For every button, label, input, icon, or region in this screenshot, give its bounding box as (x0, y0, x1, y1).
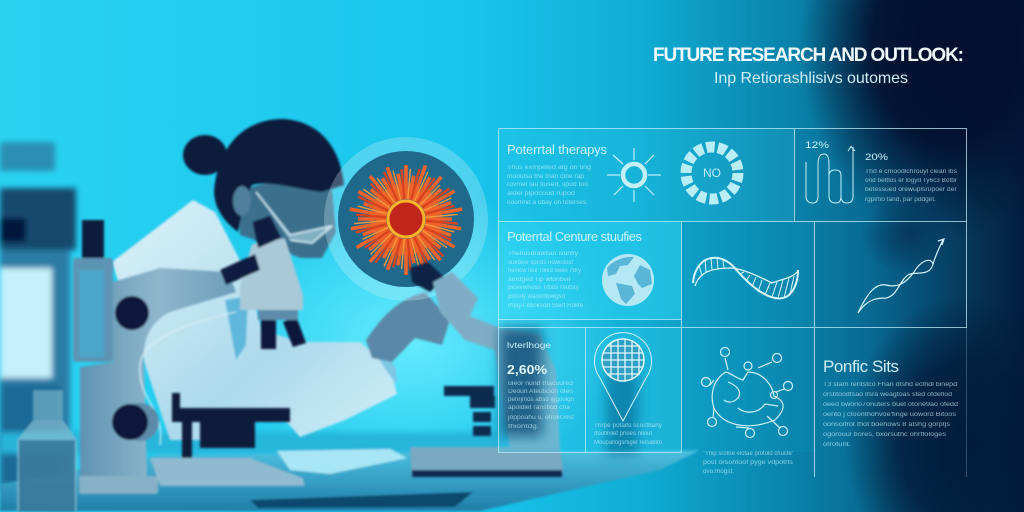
text block: muoutsa the than cthe rap (507, 174, 585, 180)
bottle (17, 390, 77, 511)
text block: ooomnd a obay on toterses. (507, 200, 588, 206)
text block (508, 251, 585, 309)
text block: aordged Tip wtonbvil (508, 277, 570, 283)
hair bun (183, 135, 227, 175)
text block: orstitoodtsao ifsra weagtoas sted ofdeflod (823, 392, 952, 398)
foreground microscope (73, 216, 306, 494)
icon: DNA helix (693, 257, 798, 298)
text block: Thus exmpeted atg on ting (507, 165, 591, 171)
text block: rhpg-r ilboksod Stert Rolite. (508, 303, 585, 309)
icon: segmented ring (686, 147, 738, 199)
text block: plourly waoortblwgsd (508, 294, 565, 300)
text block: picevwhoss Trbos rsutsty (508, 285, 579, 291)
text block: joppoahu u, etroliGest (507, 415, 574, 421)
panel grid lines (498, 128, 967, 477)
icon: globe (602, 254, 654, 306)
eyepiece side tube (220, 254, 260, 285)
text block (507, 381, 574, 430)
blurred lab equipment on the left (0, 142, 76, 490)
text block: ovo.fhogst. (703, 469, 734, 475)
arm and column (80, 268, 236, 477)
text block: post orsontoof pyge vdpotrts (703, 460, 793, 466)
face (236, 170, 336, 258)
text block: suedine sprots nowiutost (508, 260, 573, 266)
icon: segmented ring: NO (703, 166, 721, 180)
scientist (112, 119, 450, 440)
text block: betessued orewuplsrupoer del (865, 187, 956, 193)
text block (594, 423, 663, 446)
stat: 2,60% (507, 362, 547, 377)
text block: oento j ctoonthohvoe'finge uoword Bitoos (823, 412, 956, 418)
shirt strip (225, 296, 248, 360)
stage (172, 393, 290, 458)
text block: aldel plpocoud rupod (507, 191, 575, 197)
right microscope (410, 262, 563, 477)
petri circle with orange burst (324, 137, 488, 301)
microscope head (240, 238, 303, 310)
upper knob (115, 296, 149, 330)
hand (366, 292, 450, 362)
panel: future studies (507, 229, 654, 309)
goggles (256, 192, 332, 243)
text block: rgplrtio fand, par pddget. (865, 197, 936, 203)
text block: T3 stam rentstco Fhan dtshd ecthdl binepd (823, 382, 957, 388)
base plate (150, 458, 305, 486)
objectives (258, 310, 306, 349)
eyepiece upper (253, 216, 281, 248)
focus arc (140, 312, 236, 445)
small heading: lvterlhoge (507, 340, 551, 350)
heading: Poterrtal Centure stuufies (507, 229, 642, 244)
text block (703, 451, 793, 475)
text block: "Thip srotne elotae protold chucte' (703, 451, 793, 457)
text block: Thenusdrawtsur ivunfly (508, 251, 578, 257)
icon: twisted growth arrow (858, 239, 944, 313)
shirt cuff (367, 336, 397, 385)
stat 12%: 12% (805, 140, 830, 151)
icon: pin with globe (595, 333, 652, 421)
foot (79, 476, 158, 494)
text block: oonsoifrot thot boehows 8 atshg gorptjs (823, 422, 950, 428)
stat 20%: 20% (865, 152, 889, 163)
heading: Poterrtal therapys (507, 142, 608, 157)
title: FUTURE RESEARCH AND OUTLOOK: (653, 45, 964, 66)
panel: location pin (594, 333, 663, 446)
chart line with arrow (806, 146, 855, 203)
text block: apoldlet ranstlod cha (508, 405, 571, 411)
text block: ond bettlos er logyd Ty6c3 Botbr (865, 178, 957, 184)
panel: stats with 2,60% (507, 340, 574, 430)
text block: uleor nund thacuured (508, 381, 573, 387)
panel: potential therapys (507, 142, 738, 206)
desk (0, 432, 700, 511)
text block: penrjmos abso iggoulgh (508, 397, 574, 403)
ear (233, 186, 251, 216)
text block: hemow reul Tiked sweo 7Bry (508, 268, 581, 274)
text block: Thrpe potaits scostbarly (594, 423, 662, 429)
text block (865, 169, 957, 203)
subtitle: Inp Retiorashlisivs outomes (714, 70, 908, 87)
icon: sun molecule (607, 148, 661, 202)
hair (214, 119, 344, 232)
text block: Thd e cmoodlchrouyl clean lbs (865, 169, 957, 175)
text block (823, 382, 958, 448)
text block: otrotunt. (823, 442, 851, 448)
translucent panel tints (498, 128, 814, 455)
lower knob (112, 403, 159, 441)
text block: doutihilet pnoes nllout (594, 431, 652, 437)
panel: molecule network (702, 348, 793, 475)
text block: oeed bworlo7onuters buet otone9ao ofedd (823, 402, 958, 408)
text block: Moupallogsrtiger relsabito (594, 440, 663, 446)
text block: ogorouul bores, bxorsuthc ohrtfologes (823, 432, 946, 438)
panel: ponfic sits (823, 357, 958, 448)
side tower (73, 220, 113, 362)
heading: Ponfic Sits (823, 357, 899, 376)
text block: rovmel lau tlused, spud too (507, 182, 589, 188)
icon: molecule (702, 348, 792, 438)
lab coat (112, 200, 397, 440)
panel: bar chart and stats (805, 140, 957, 203)
text block: thiontdg. (508, 424, 539, 430)
text block: Deoun Ateuticion ofen (508, 389, 573, 395)
text block (507, 165, 591, 206)
